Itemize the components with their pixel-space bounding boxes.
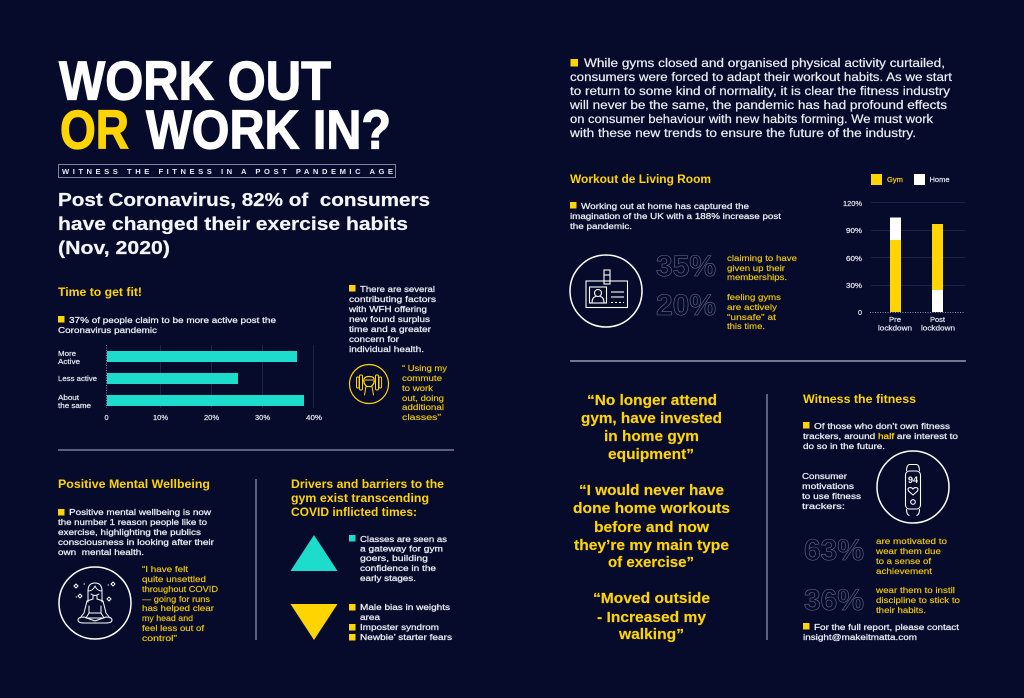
- text: wellbeing explanation: the number 1 reason people like to: [58, 517, 207, 527]
- heading: drivers and barriers: Drivers and barriers to the: [291, 477, 444, 491]
- stat: 20 percent: “unsafe” at: [727, 312, 777, 322]
- stat: 63 percent: to a sense of: [876, 556, 932, 566]
- text: fitness tracker interest: do so in the future.: [803, 441, 885, 451]
- stat: 35 percent: 35%: [656, 250, 716, 283]
- stat: 20 percent: are actively: [727, 302, 778, 312]
- text: more active claim: [58, 315, 276, 335]
- text: drivers: [349, 534, 447, 583]
- heading: drivers and barriers: gym exist transcending: [291, 491, 429, 505]
- text: drivers: confidence in the: [360, 563, 436, 573]
- icon: membership card: [570, 255, 642, 327]
- chart legend: Gym: [887, 175, 903, 184]
- text: contact: insight@makeitmatta.com: [803, 632, 917, 642]
- icon: fitness tracker: 94: [908, 475, 918, 485]
- panel: time to get fit: [58, 285, 323, 422]
- text: consumer motivations: [802, 471, 861, 511]
- icon: teal up triangle: [290, 535, 338, 571]
- stat: 63 percent: wear them due: [875, 546, 941, 556]
- bar chart: activity levels: About: [58, 393, 79, 402]
- text: fitness tracker interest: trackers, around half are interest to: [803, 431, 958, 441]
- quote: unsettled: control”: [142, 633, 177, 643]
- text: contributing factors: new found surplus: [349, 314, 430, 324]
- text: fitness tracker interest: Of those who don’t own fitness: [814, 421, 950, 431]
- stat: 20 percent: [656, 289, 781, 331]
- stacked bar chart: gym vs home: Post: [930, 315, 945, 324]
- bar chart: activity levels: Less active: [58, 374, 97, 383]
- stat: 36 percent: 36%: [804, 584, 864, 617]
- bar chart: activity levels: 0: [104, 413, 108, 422]
- quote: home gym equipment: in home gym: [604, 429, 699, 445]
- panel: positive mental wellbeing: [58, 477, 218, 643]
- quote: home gym equipment: gym, have invested: [581, 411, 722, 427]
- stacked bar chart: gym vs home: [843, 199, 965, 332]
- stat: 20 percent: this time.: [727, 321, 765, 331]
- quote: moved outside: [593, 591, 710, 643]
- quote: moved outside: “Moved outside: [593, 591, 710, 607]
- text: barriers: Imposter syndrom: [360, 622, 439, 632]
- text: consumer motivations: Consumer: [802, 471, 847, 481]
- text: contact: [803, 622, 960, 642]
- text: wellbeing explanation: [58, 507, 214, 557]
- stacked bar chart: gym vs home: Pre: [889, 315, 901, 324]
- heading: drivers and barriers: [291, 477, 444, 519]
- bar chart: activity levels: Active: [58, 357, 80, 366]
- text: contributing factors: concern for: [349, 334, 399, 344]
- stacked bar chart: gym vs home: lockdown: [878, 324, 912, 332]
- text: fitness tracker interest: [803, 421, 958, 451]
- title: WORK OUT: [59, 50, 331, 112]
- quote: moved outside: walking”: [618, 627, 684, 643]
- text: wellbeing explanation: own mental health.: [58, 547, 144, 557]
- bar chart: activity levels: More: [58, 349, 76, 358]
- quote: commute: classes”: [402, 412, 441, 422]
- title: [59, 50, 391, 160]
- quote: home workouts: before and now: [594, 520, 710, 536]
- quote: unsettled: throughout COVID: [142, 584, 218, 594]
- icon: fitness tracker: [877, 451, 949, 523]
- subtitle banner: WITNESS THE FITNESS IN A POST PANDEMIC AGE: [62, 167, 393, 176]
- stacked bar chart: gym vs home: 90%: [846, 226, 863, 235]
- quote: unsettled: feel less out of: [142, 623, 205, 633]
- subtitle banner: [58, 164, 396, 178]
- text: home workout increase: [570, 201, 782, 231]
- chart legend: [871, 174, 950, 185]
- stat: 36 percent: their habits.: [876, 605, 926, 615]
- text: drivers: early stages.: [360, 573, 416, 583]
- quote: unsettled: — going for runs: [142, 594, 210, 604]
- text: home workout increase: Working out at home has captured the: [581, 201, 749, 211]
- stat: 63 percent: [804, 534, 947, 576]
- text: more active claim: Coronavirus pandemic: [58, 325, 158, 335]
- intro text block: While gyms closed and organised physical activity curtailed,: [584, 56, 945, 70]
- icon: yellow down triangle: [290, 604, 338, 640]
- panel: workout de living room: [570, 172, 965, 332]
- stat: 35 percent: given up their: [727, 263, 785, 273]
- heading: positive mental wellbeing: Positive Mental Wellbeing: [58, 477, 210, 491]
- stacked bar chart: gym vs home: 60%: [846, 254, 863, 263]
- text: more active claim: 37% of people claim to be more active post the: [69, 315, 276, 325]
- text: contributing factors: [348, 284, 436, 354]
- text: contributing factors: contributing factors: [349, 294, 436, 304]
- text: barriers: [349, 602, 452, 642]
- stacked bar chart: gym vs home: 30%: [846, 281, 863, 290]
- text: wellbeing explanation: consciousness in looking after their: [58, 537, 214, 547]
- quote: home workouts: [573, 483, 730, 571]
- bar chart: activity levels: 40%: [306, 413, 323, 422]
- intro text block: [569, 56, 953, 140]
- text: consumer motivations: motivations: [802, 481, 854, 491]
- stacked bar chart: gym vs home: 0: [858, 308, 862, 317]
- heading: witness the fitness: Witness the fitness: [803, 392, 916, 406]
- intro text block: will never be the same, the pandemic has had profound effects: [569, 98, 947, 112]
- bar chart: activity levels: 10%: [153, 413, 169, 422]
- stat: 63 percent: 63%: [804, 534, 864, 567]
- quote: unsettled: my head and: [142, 613, 193, 623]
- quote: home gym equipment: [581, 393, 722, 463]
- intro text block: consumers were forced to adapt their workout habits. As we start: [570, 70, 953, 84]
- text: barriers: Male bias in weights: [360, 602, 450, 612]
- quote: commute: to work: [402, 383, 434, 393]
- stacked bar chart: gym vs home: 120%: [843, 199, 863, 208]
- panel: large consumer quotes: [573, 393, 730, 643]
- bar chart: activity levels: 30%: [255, 413, 271, 422]
- quote: commute: out, doing: [402, 393, 444, 403]
- text: contact: For the full report, please contact: [814, 622, 960, 632]
- text: barriers: Newbie’ starter fears: [360, 632, 452, 642]
- text: home workout increase: the pandemic.: [570, 221, 632, 231]
- title: OR: [60, 98, 129, 160]
- stat: 35 percent: [656, 250, 797, 283]
- stat: 36 percent: wear them to instil: [875, 585, 955, 595]
- title: WORK IN?: [146, 98, 391, 160]
- stat: 63 percent: achievement: [876, 566, 933, 576]
- stat: 20 percent: feeling gyms: [727, 292, 781, 302]
- text: contributing factors: time and a greater: [349, 324, 431, 334]
- stat: 36 percent: [804, 584, 960, 617]
- quote: unsettled: has helped clear: [142, 603, 214, 613]
- bar chart: activity levels: 20%: [204, 413, 220, 422]
- headline statistic: Post Coronavirus, 82% of consumers: [58, 189, 430, 210]
- text: contributing factors: with WFH offering: [348, 304, 427, 314]
- panel: drivers and barriers: [290, 477, 452, 642]
- text: drivers: Classes are seen as: [360, 534, 447, 544]
- heading: workout de living room: Workout de Living Room: [570, 172, 711, 186]
- intro text block: with these new trends to ensure the future of the industry.: [569, 126, 916, 140]
- quote: home gym equipment: “No longer attend: [587, 393, 717, 409]
- text: wellbeing explanation: exercise, highlighting the publics: [58, 527, 201, 537]
- quote: home workouts: of exercise”: [608, 555, 694, 571]
- bar chart: activity levels: [58, 345, 323, 422]
- text: contributing factors: There are several: [360, 284, 435, 294]
- text: consumer motivations: to use fitness: [802, 491, 861, 501]
- quote: home workouts: done home workouts: [573, 501, 730, 517]
- quote: unsettled: [142, 564, 218, 643]
- headline statistic: (Nov, 2020): [58, 237, 170, 258]
- intro text block: on consumer behaviour with new habits forming. We must work: [570, 112, 934, 126]
- quote: commute: additional: [402, 402, 444, 412]
- quote: moved outside: - Increased my: [597, 610, 707, 626]
- quote: unsettled: “I have felt: [142, 564, 189, 574]
- quote: commute: “ Using my: [402, 363, 448, 373]
- quote: home workouts: “I would never have: [579, 483, 724, 499]
- icon: dumbbell and fist: [350, 364, 388, 404]
- panel: witness the fitness: [802, 392, 960, 642]
- stat: 35 percent: memberships.: [727, 272, 787, 282]
- headline statistic: have changed their exercise habits: [58, 213, 408, 234]
- stat: 36 percent: discipline to stick to: [876, 595, 960, 605]
- text: drivers: a gateway for gym: [360, 544, 443, 554]
- quote: home workouts: they’re my main type: [574, 538, 729, 554]
- stat: 20 percent: 20%: [656, 289, 716, 322]
- quote: commute: commute: [402, 373, 442, 383]
- text: consumer motivations: trackers:: [802, 501, 845, 511]
- text: home workout increase: imagination of the UK with a 188% increase post: [570, 211, 782, 221]
- text: barriers: area: [360, 612, 380, 622]
- icon: meditating person: [59, 567, 131, 639]
- intro text block: to return to some kind of normality, it is clear the fitness industry: [570, 84, 951, 98]
- chart legend: Home: [930, 175, 950, 184]
- heading: drivers and barriers: COVID inflicted times:: [291, 505, 417, 519]
- text: wellbeing explanation: Positive mental wellbeing is now: [69, 507, 212, 517]
- heading: time to get fit: Time to get fit!: [58, 285, 142, 299]
- quote: unsettled: quite unsettled: [142, 574, 206, 584]
- quote: commute: [402, 363, 448, 422]
- text: contributing factors: individual health.: [349, 344, 424, 354]
- stat: 35 percent: claiming to have: [727, 253, 797, 263]
- text: drivers: goers, building: [360, 553, 428, 563]
- headline statistic: [58, 189, 430, 258]
- stacked bar chart: gym vs home: lockdown: [921, 324, 955, 332]
- stat: 63 percent: are motivated to: [876, 536, 947, 546]
- quote: home gym equipment: equipment”: [608, 447, 694, 463]
- bar chart: activity levels: the same: [58, 401, 91, 410]
